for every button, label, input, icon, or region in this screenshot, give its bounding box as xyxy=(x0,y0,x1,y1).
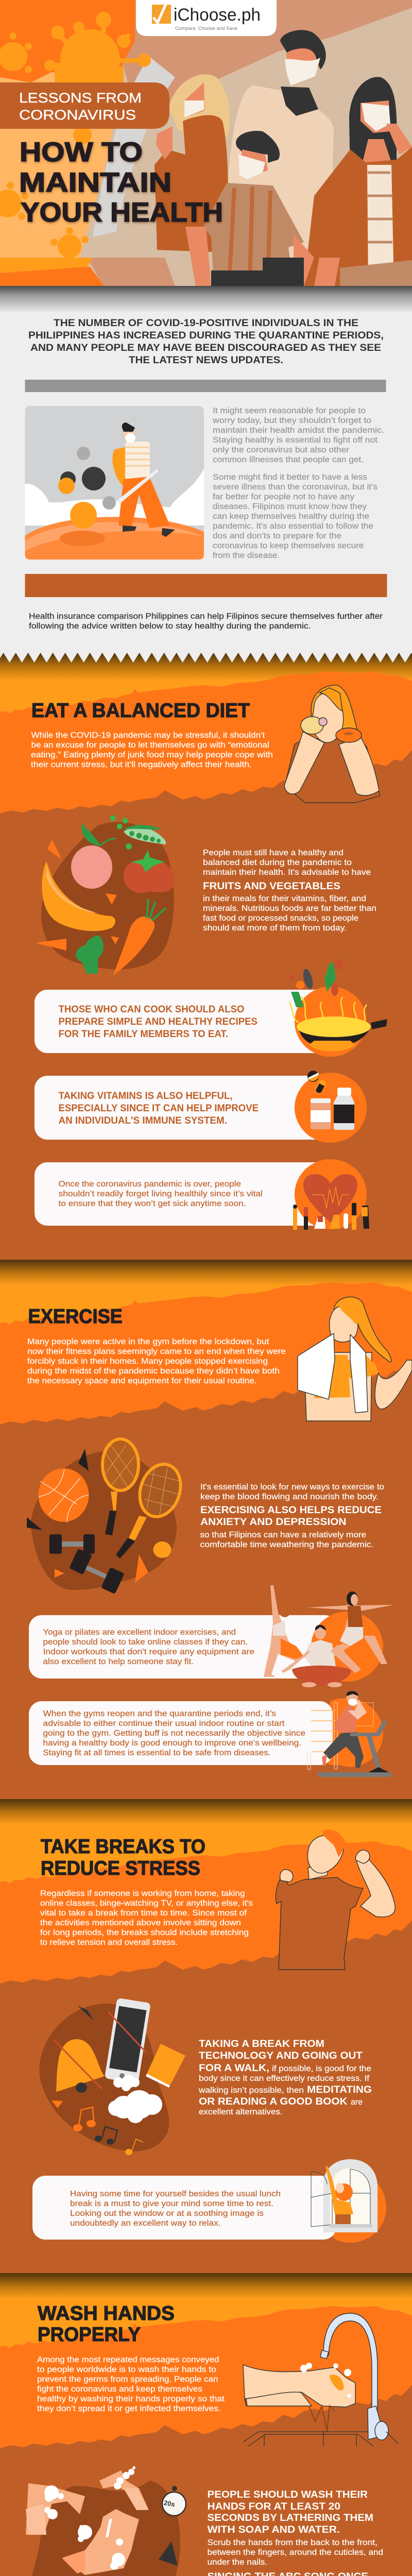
body text: now their fitness plans seemingly came to an end when they were xyxy=(27,1347,286,1356)
main title: MAINTAIN xyxy=(19,167,171,198)
heading: WASH HANDS xyxy=(38,2302,175,2325)
illustration: faucet and hands xyxy=(243,2313,398,2446)
technology break text: OR READING A GOOD BOOK xyxy=(199,2096,348,2107)
card text: also excellent to help someone stay fit. xyxy=(43,1657,194,1666)
grey divider bar xyxy=(25,380,386,392)
card text xyxy=(43,1709,305,1757)
body text: fight the coronavirus and keep themselves xyxy=(37,2385,202,2394)
technology break text: are xyxy=(351,2098,363,2107)
heading: PROPERLY xyxy=(38,2324,141,2346)
fruits and vegetables text: balanced diet during the pandemic to xyxy=(203,858,352,867)
card: vitamins xyxy=(35,1071,367,1143)
intro paragraph: It might seem reasonable for people to xyxy=(213,406,366,415)
card text: Looking out the window or at a soothing image is xyxy=(70,2209,264,2218)
fruits and vegetables text: should eat more of them from today. xyxy=(203,924,347,933)
main title xyxy=(19,137,223,228)
intro paragraph: diseases. Filipinos must know how they xyxy=(213,502,367,511)
illustration: sports equipment xyxy=(27,1439,187,1594)
subtitle text: LESSONS FROM xyxy=(19,90,142,106)
exercising text: so that Filipinos can have a relatively more xyxy=(200,1531,366,1539)
card text: Indoor workouts that don't require any equipment are xyxy=(43,1648,254,1656)
logo wordmark: iChoose.ph xyxy=(174,5,261,25)
icon: heart with exercising people xyxy=(293,1174,369,1230)
technology break text: MEDITATING xyxy=(307,2084,372,2095)
intro statement: AND MANY PEOPLE MAY HAVE BEEN DISCOURAGED AS THEY SEE xyxy=(30,343,381,353)
intro paragraph: only the coronavirus but also other xyxy=(213,446,349,454)
person: boy in mask xyxy=(185,131,314,286)
intro paragraph: worry today, but they shouldn’t forget to xyxy=(212,416,371,425)
intro statement: THE LATEST NEWS UPDATES. xyxy=(129,355,283,366)
body text: healthy by washing their hands properly so that xyxy=(37,2395,225,2403)
card: living healthily xyxy=(35,1159,369,1230)
body text: the activities mentioned above involve sitting down xyxy=(40,1919,241,1927)
handwashing text: Scrub the hands from the back to the front, xyxy=(207,2538,377,2547)
intro paragraph: far better for people not to have any xyxy=(213,493,354,501)
card text: Once the coronavirus pandemic is over, people xyxy=(59,1180,241,1189)
intro paragraph xyxy=(212,406,384,560)
body text: during the midst of the pandemic because they didn’t have both xyxy=(27,1367,280,1376)
body text: Regardless if someone is working from home, taking xyxy=(40,1889,245,1898)
card text: shouldn’t readily forget living healthily since it’s vital xyxy=(59,1190,263,1198)
lead-in text: Health insurance comparison Philippines can help Filipinos secure themselves further after xyxy=(29,612,383,621)
intro paragraph: pandemic. It's also essential to follow the xyxy=(213,522,373,531)
illustration: yoga figures xyxy=(264,1585,394,1687)
hero banner xyxy=(0,0,412,286)
logo mark xyxy=(152,4,171,24)
exercising text: comfortable time weathering the pandemic. xyxy=(200,1540,374,1549)
illustration: hand washing steps xyxy=(26,2466,186,2576)
panel: wash hands xyxy=(0,2273,412,2576)
card text xyxy=(59,1091,259,1126)
intro paragraph: coronavirus to keep themselves secure xyxy=(213,541,364,550)
handwashing text: WITH SOAP AND WATER. xyxy=(207,2524,340,2535)
body text: they don’t spread it or get infected themselves. xyxy=(37,2404,220,2413)
technology break text: walking isn’t possible, then xyxy=(198,2086,304,2095)
fruits and vegetables text xyxy=(203,849,376,933)
technology break text: excellent alternatives. xyxy=(199,2108,282,2116)
card text: PREPARE SIMPLE AND HEALTHY RECIPES xyxy=(59,1016,258,1027)
fruits and vegetables text: maintain their health. It's advisable to have xyxy=(203,868,371,877)
exercising text: keep the blood flowing and nourish the body. xyxy=(200,1493,379,1501)
technology break text: if possible, is good for the xyxy=(272,2064,371,2073)
card text: When the gyms reopen and the quarantine periods end, it’s xyxy=(43,1709,276,1718)
illustration: fruits and vegetables xyxy=(35,815,174,975)
body text: to people worldwide is to wash their hands to xyxy=(37,2365,216,2374)
heading xyxy=(41,1836,205,1879)
card text: going to the gym. Getting buff is not necessarily the objective since xyxy=(43,1729,305,1738)
body text: Among the most repeated messages conveyed xyxy=(37,2355,219,2364)
card text: FOR THE FAMILY MEMBERS TO EAT. xyxy=(59,1029,228,1040)
body text xyxy=(31,731,273,769)
heading: TAKE BREAKS TO xyxy=(41,1836,205,1858)
card text: undoubtedly an excellent way to relax. xyxy=(70,2219,220,2228)
person: woman with long dark hair in mask xyxy=(304,77,412,286)
subtitle text xyxy=(19,90,142,123)
handwashing text: PEOPLE SHOULD WASH THEIR xyxy=(207,2489,368,2500)
heading xyxy=(38,2302,175,2346)
intro paragraph: Staying healthy is essential to fight off not xyxy=(213,436,378,445)
handwashing text: under the nails. xyxy=(207,2558,267,2567)
fruits and vegetables text: People must still have a healthy and xyxy=(203,849,344,857)
illustration: woman eating donuts xyxy=(284,685,380,803)
intro paragraph: Some might find it better to have a less xyxy=(213,473,367,482)
technology break text: body since it can effectively reduce stress. If xyxy=(199,2074,370,2083)
subtitle pill xyxy=(0,82,169,129)
illustration: phone, alarm, book, clouds, notes xyxy=(39,1998,185,2155)
body text: eating.” Eating plenty of junk food may help people cope with xyxy=(31,751,273,759)
main title: HOW TO xyxy=(20,137,143,167)
body text xyxy=(37,2355,225,2413)
illustration: woman with towel xyxy=(298,1297,412,1421)
card text: break is a must to give your mind some time to rest. xyxy=(70,2199,273,2208)
card text xyxy=(70,2190,281,2228)
body text: the necessary space and equipment for their usual routine. xyxy=(27,1377,257,1385)
heading: EAT A BALANCED DIET xyxy=(31,700,250,722)
lead-in text: following the advice written below to stay healthy during the pandemic. xyxy=(29,622,311,631)
card: gyms reopen xyxy=(29,1691,391,1777)
intro paragraph: can keep themselves healthy during the xyxy=(213,512,369,521)
intro statement xyxy=(28,318,384,366)
technology break text: TECHNOLOGY AND GOING OUT xyxy=(199,2050,363,2061)
card text: to ensure that they won’t get sick anytime soon. xyxy=(59,1199,246,1208)
technology break text xyxy=(198,2039,372,2116)
logo card xyxy=(136,0,277,36)
card text xyxy=(59,1180,263,1208)
card text: THOSE WHO CAN COOK SHOULD ALSO xyxy=(59,1004,244,1015)
intro paragraph: severe illness than the coronavirus, but it’s xyxy=(213,483,377,492)
card text: having a healthy body is good enough to improve one's wellbeing. xyxy=(43,1739,301,1748)
icon: vitamin bottles and pills xyxy=(307,1071,354,1130)
exercising text xyxy=(200,1483,384,1549)
handwashing text xyxy=(207,2489,383,2576)
body text: be an excuse for people to let themselves go with “emotional xyxy=(31,741,269,750)
panel: eat a balanced diet xyxy=(0,653,412,1260)
technology break text: TAKING A BREAK FROM xyxy=(199,2039,324,2049)
handwashing text: SECONDS BY LATHERING THEM xyxy=(207,2513,373,2523)
card text: AN INDIVIDUAL'S IMMUNE SYSTEM. xyxy=(59,1115,227,1126)
intro statement: PHILIPPINES HAS INCREASED DURING THE QUARANTINE PERIODS, xyxy=(28,330,384,341)
card text: Staying fit at all times is essential to be safe from diseases. xyxy=(43,1749,271,1757)
intro statement: THE NUMBER OF COVID-19-POSITIVE INDIVIDUALS IN THE xyxy=(54,318,358,329)
person: tall man in mask xyxy=(227,30,334,286)
panel: take breaks xyxy=(0,1799,412,2273)
subtitle text: CORONAVIRUS xyxy=(19,107,136,123)
main title: YOUR HEALTH xyxy=(21,197,223,228)
brown divider bar xyxy=(25,574,387,597)
card: cooking xyxy=(35,960,387,1057)
person: blonde woman in mask xyxy=(154,74,230,252)
card: yoga xyxy=(29,1585,394,1687)
intro paragraph: common illnesses that people can get. xyxy=(213,455,364,464)
fruits and vegetables text: minerals. Nutritious foods are far better than xyxy=(203,904,376,913)
intro paragraph: maintain their health amidst the pandemic. xyxy=(213,426,384,435)
hero shadow xyxy=(0,286,412,313)
illustration: hand washing steps: 20s xyxy=(163,2499,176,2509)
body text: vital to take a break from time to time. Since most of xyxy=(40,1909,247,1918)
handwashing text: between the fingers, around the cuticles, and xyxy=(207,2548,383,2557)
card text: people should look to take online classes if they can. xyxy=(43,1638,248,1647)
technology break text: FOR A WALK, xyxy=(199,2063,269,2074)
exercising text: It's essential to look for new ways to exercise to xyxy=(200,1483,384,1492)
card: time for yourself xyxy=(32,2159,386,2243)
virus shapes xyxy=(0,12,151,273)
body text xyxy=(27,1337,286,1385)
illustration: man stretching xyxy=(276,1829,395,1970)
fruits and vegetables text: fast food or processed snacks, so people xyxy=(203,914,358,923)
heading: REDUCE STRESS xyxy=(41,1857,200,1879)
heading: EXERCISE xyxy=(28,1306,123,1328)
body text: While the COVID-19 pandemic may be stressful, it shouldn't xyxy=(31,731,265,740)
illustration: man on treadmill xyxy=(307,1691,391,1777)
fruits and vegetables text: in their meals for their vitamins, fiber, and xyxy=(203,894,366,903)
card text: advisable to either continue their usual indoor routine or start xyxy=(43,1719,285,1728)
illustration: woman at window xyxy=(311,2159,377,2232)
panel: exercise xyxy=(0,1260,412,1799)
body text: forcibly stuck in their homes. Many people stopped exercising xyxy=(27,1357,268,1366)
body text: for long periods, the breaks should include stretching xyxy=(40,1928,249,1937)
fruits and vegetables text: FRUITS AND VEGETABLES xyxy=(203,881,340,892)
body text: their current stress, but it’ll negatively affect their health. xyxy=(31,760,252,769)
card text: Yoga or pilates are excellent indoor exercises, and xyxy=(43,1628,236,1637)
illustration: man with shield and sword xyxy=(25,406,204,560)
handwashing text: HANDS FOR AT LEAST 20 xyxy=(207,2501,340,2512)
logo tagline: Compare, Choose and Save xyxy=(175,26,237,31)
body text: Many people were active in the gym before the lockdown, but xyxy=(27,1337,269,1346)
icon: wok with noodles xyxy=(289,960,387,1052)
card text: Having some time for yourself besides the usual lunch xyxy=(70,2190,281,2198)
exercising text: ANXIETY AND DEPRESSION xyxy=(200,1517,346,1528)
intro paragraph: dos and don’ts to prepare for the xyxy=(213,532,341,540)
card text: TAKING VITAMINS IS ALSO HELPFUL, xyxy=(59,1091,233,1101)
intro paragraph: from the disease. xyxy=(213,551,280,560)
exercising text: EXERCISING ALSO HELPS REDUCE xyxy=(200,1505,382,1516)
lead-in text xyxy=(29,612,383,631)
body text xyxy=(40,1889,253,1947)
body text: online classes, binge-watching TV, or anything else, it's xyxy=(40,1899,253,1908)
body text: to relieve tension and overall stress. xyxy=(40,1938,178,1947)
body text: prevent the germs from spreading. People can xyxy=(37,2375,218,2384)
card text xyxy=(59,1004,258,1040)
card text xyxy=(43,1628,254,1666)
card text: ESPECIALLY SINCE IT CAN HELP IMPROVE xyxy=(59,1103,259,1114)
